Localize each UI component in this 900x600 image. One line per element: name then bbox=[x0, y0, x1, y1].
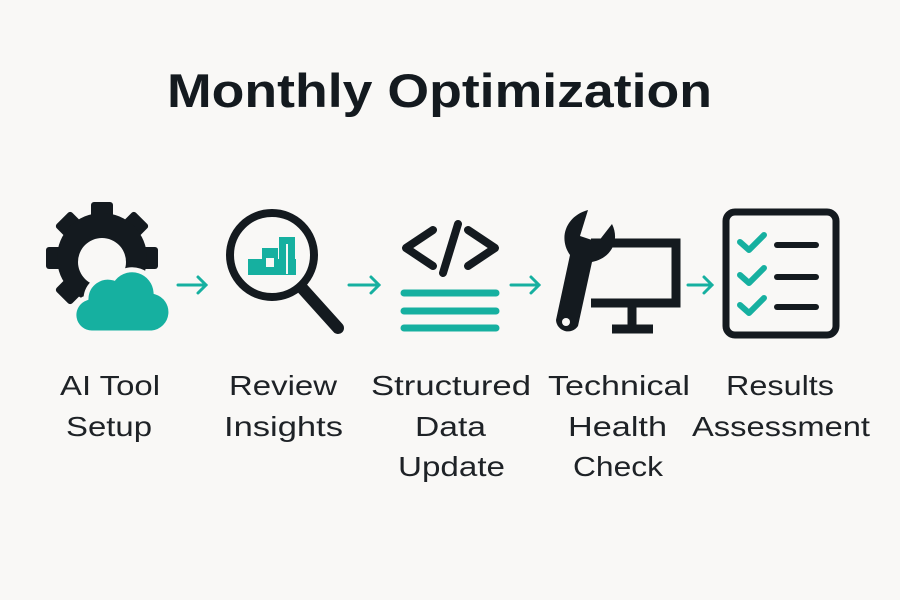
icon: checklist bbox=[726, 212, 836, 335]
label: Results Assessment: Results bbox=[726, 370, 834, 401]
label: Results Assessment: Assessment bbox=[692, 411, 870, 442]
label: Structured Data Update: Structured bbox=[371, 370, 531, 401]
icon: gear with cloud bbox=[46, 202, 171, 333]
icon: magnifier with chart bbox=[230, 213, 338, 328]
arrow 3 bbox=[511, 277, 539, 293]
label: Results Assessment bbox=[692, 370, 870, 442]
label: Review Insights: Review bbox=[229, 370, 338, 401]
icon: wrench and monitor bbox=[556, 210, 676, 331]
label: AI Tool Setup: AI Tool bbox=[60, 370, 160, 401]
arrow 1 bbox=[178, 277, 206, 293]
label: Review Insights: Insights bbox=[224, 411, 343, 442]
label: Structured Data Update: Update bbox=[398, 451, 505, 482]
label: Structured Data Update bbox=[371, 370, 531, 482]
title: Monthly Optimization bbox=[167, 64, 712, 117]
label: Technical Health Check: Check bbox=[573, 451, 664, 482]
arrow 2 bbox=[349, 277, 379, 293]
arrow 4 bbox=[688, 277, 712, 293]
icon: code with lines bbox=[404, 224, 496, 328]
label: Review Insights bbox=[224, 370, 343, 442]
label: Technical Health Check: Technical bbox=[548, 370, 690, 401]
label: Technical Health Check bbox=[548, 370, 690, 482]
label: Technical Health Check: Health bbox=[568, 411, 667, 442]
label: AI Tool Setup bbox=[60, 370, 160, 442]
label: Structured Data Update: Data bbox=[415, 411, 486, 442]
label: AI Tool Setup: Setup bbox=[66, 411, 152, 442]
